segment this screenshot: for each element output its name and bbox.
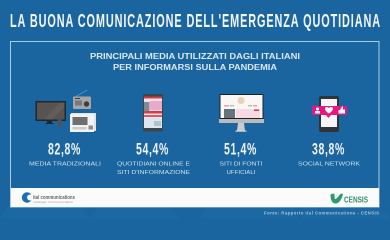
stat: quotidiani online xyxy=(117,140,190,176)
stat: siti di fonti ufficiali: UFFICIALI xyxy=(226,170,256,176)
subtitle: PER INFORMARSI SULLA PANDEMIA xyxy=(113,63,277,72)
stat: quotidiani online: SITI D'INFORMAZIONE xyxy=(117,170,190,176)
stat: social network xyxy=(298,140,360,168)
stat: siti di fonti ufficiali: SITI DI FONTI xyxy=(220,162,263,168)
icon: desktop monitor xyxy=(219,94,264,132)
panel: main frame xyxy=(10,42,379,207)
logo: ital communications: strategic communication xyxy=(33,201,74,204)
stat: quotidiani online: QUOTIDIANI ONLINE E xyxy=(117,162,190,168)
icon: newspaper xyxy=(70,113,96,132)
icon: radio xyxy=(73,90,91,109)
logo: ital communications: ital communications xyxy=(33,195,75,201)
source note: Fonte: Rapporto Ital Communications - CENSIS xyxy=(264,210,379,216)
subtitle: PRINCIPALI MEDIA UTILIZZATI DAGLI ITALIANI xyxy=(90,52,300,61)
logo: censis xyxy=(330,194,369,205)
stat: quotidiani online: 54,4% xyxy=(136,140,169,158)
icon: phone with news site xyxy=(143,94,163,132)
logo: censis: CENSIS xyxy=(344,196,369,205)
icon: phone with social reactions xyxy=(312,96,347,132)
icon: traditional media xyxy=(36,90,96,132)
stat: siti di fonti ufficiali xyxy=(220,140,263,176)
subtitle xyxy=(90,52,300,72)
stat: social network: 38,8% xyxy=(312,140,345,158)
stat: media tradizionali: MEDIA TRADIZIONALI xyxy=(29,162,101,168)
logo: ital communications xyxy=(22,192,75,204)
stat: siti di fonti ufficiali: 51,4% xyxy=(224,140,257,158)
panel: logo strip xyxy=(11,188,379,207)
stat: social network: SOCIAL NETWORK xyxy=(298,162,360,168)
stat: media tradizionali xyxy=(29,140,101,168)
stat: media tradizionali: 82,8% xyxy=(48,140,81,158)
icon: television xyxy=(36,101,66,127)
